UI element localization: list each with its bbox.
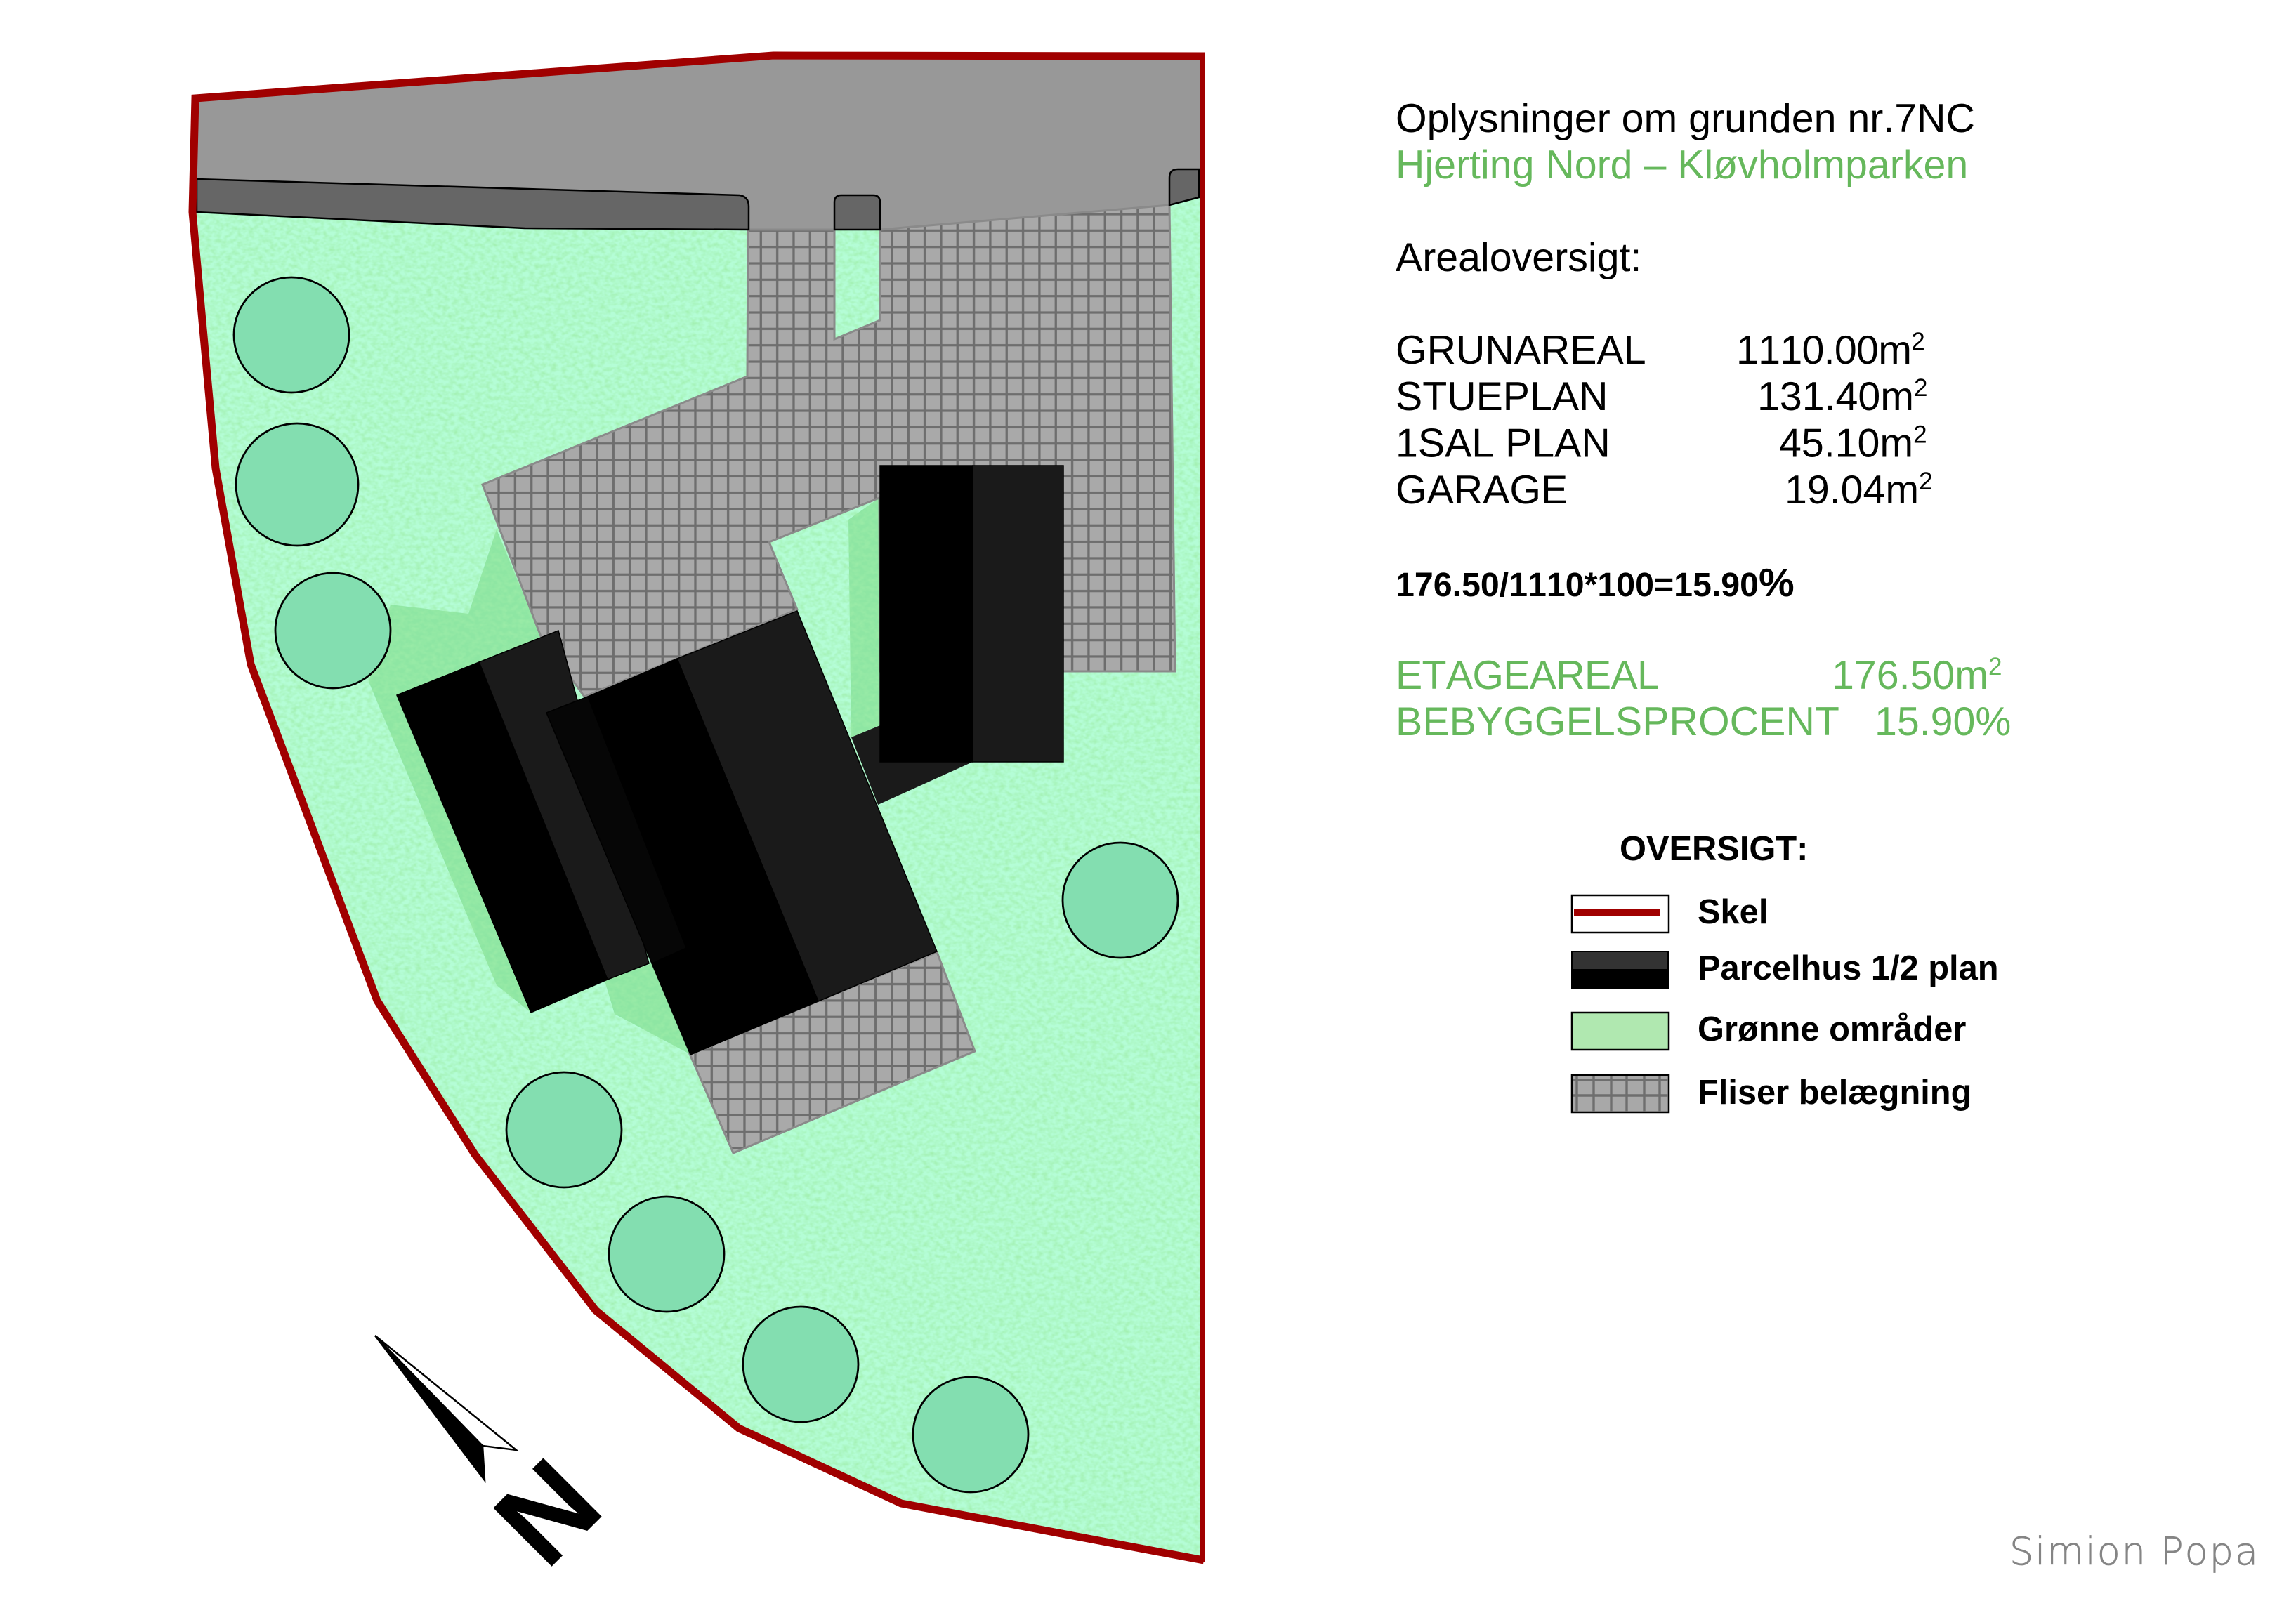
house A — [397, 631, 649, 1013]
green lawn area — [192, 55, 1202, 1559]
area table — [1396, 328, 1933, 513]
summary: 2 — [1988, 653, 2002, 680]
legend — [1571, 830, 1999, 1112]
summary: ETAGEAREAL — [1396, 653, 1659, 698]
house C — [880, 466, 1063, 762]
paved tiles lower terrace — [690, 952, 975, 1153]
area table: 1SAL PLAN — [1396, 421, 1611, 466]
arrow needle — [375, 1336, 516, 1480]
legend item: boundary: Skel — [1698, 893, 1768, 931]
garage link — [851, 725, 973, 805]
paved tiles upper terrace — [483, 205, 1175, 697]
area table: 2 — [1911, 328, 1924, 355]
title: Oplysninger om grunden nr.7NC — [1396, 96, 1975, 141]
calculation: 176.50/1110*100=15.90% — [1396, 560, 1795, 605]
house B — [546, 611, 937, 1055]
summary: BEBYGGELSPROCENT — [1396, 699, 1839, 744]
area table: 2 — [1914, 374, 1927, 402]
legend item: paving: Fliser belægning — [1698, 1074, 1972, 1112]
area table: GARAGE — [1396, 468, 1568, 513]
building shadows on lawn — [369, 498, 879, 1055]
site plan — [190, 53, 1208, 1562]
area table: 2 — [1919, 468, 1933, 495]
legend item: boundary — [1572, 893, 1768, 933]
trees — [234, 277, 1178, 1492]
driveway dark band middle — [834, 195, 880, 230]
area table: 1110.00m — [1736, 328, 1911, 373]
information block — [1396, 96, 2011, 744]
property boundary — [192, 55, 1205, 1562]
driveway dark band left — [197, 179, 749, 230]
driveway dark band right — [1169, 169, 1199, 205]
legend item: paving — [1572, 1074, 1972, 1112]
subtitle: Hjerting Nord – Kløvholmparken — [1396, 143, 1968, 187]
summary: 15.90% — [1875, 699, 2011, 744]
legend item: green areas — [1572, 1010, 1966, 1050]
summary — [1396, 653, 2011, 744]
legend item: house: Parcelhus 1/2 plan — [1698, 949, 1999, 987]
north letter: N — [470, 1435, 626, 1590]
area table: 19.04m — [1785, 468, 1919, 513]
road — [194, 55, 1202, 230]
legend item: house — [1571, 949, 1999, 989]
area heading: Arealoversigt: — [1396, 235, 1641, 280]
summary: 176.50m — [1832, 653, 1988, 698]
area table: 45.10m — [1779, 421, 1913, 466]
author signature: Simion Popa — [2009, 1529, 2258, 1574]
lawn texture — [197, 198, 1200, 1555]
area table: 131.40m — [1757, 374, 1914, 419]
area table: 2 — [1913, 421, 1927, 448]
legend item: green areas: Grønne områder — [1698, 1010, 1966, 1048]
area table: STUEPLAN — [1396, 374, 1608, 419]
legend heading: OVERSIGT: — [1620, 830, 1808, 868]
area table: GRUNAREAL — [1396, 328, 1646, 373]
north arrow — [375, 1336, 626, 1590]
